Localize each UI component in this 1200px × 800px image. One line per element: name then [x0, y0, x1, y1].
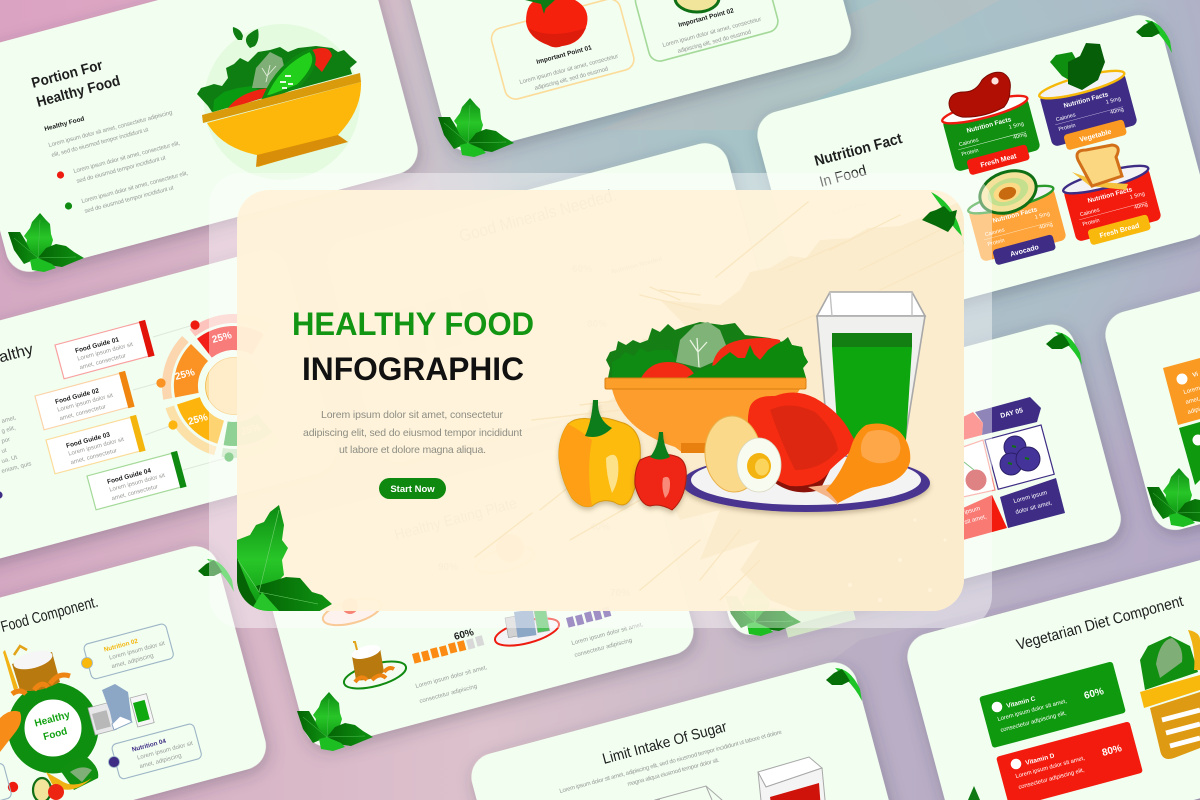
- day 04 caption box: ipsum: [964, 506, 981, 516]
- guide 01: [55, 320, 155, 380]
- day 04 caption box: sit amet,: [964, 514, 988, 526]
- cartons on red plate: [492, 609, 562, 651]
- box nutrition 02: Lorem ipsum dolor sit: [109, 641, 166, 662]
- faint heading: Nutrition Fact: [831, 202, 867, 217]
- hub ring: Healthy: [33, 709, 72, 730]
- can: fresh meat: 1 5mg: [1008, 121, 1025, 131]
- box nutrition 02: [83, 623, 174, 680]
- can: vegetable: Nutrition Facts: [1063, 91, 1109, 110]
- box nutrition 02: amet, adipiscing: [111, 653, 154, 670]
- caption 2: [571, 622, 644, 659]
- body text partial: por: [1, 437, 11, 445]
- caption 2: consectetur adipiscing: [574, 638, 633, 659]
- can: fresh meat: [940, 72, 1043, 179]
- red dot: [8, 782, 18, 792]
- icon: corner leaves bottom: [725, 577, 801, 636]
- icon: yellow pepper: [559, 400, 640, 507]
- icon: cartons: [88, 684, 154, 735]
- heading: good minerals: Good Minerals Needed.: [457, 186, 619, 246]
- card: vitamins partial: [1100, 210, 1200, 535]
- can: fresh bread: Calories: [1079, 207, 1101, 218]
- card: important points: [393, 0, 856, 157]
- card: vegetarian diet component: [902, 532, 1200, 800]
- heading: [813, 130, 904, 191]
- icon: leaves top right: [922, 192, 964, 247]
- icon: corner leaves: [297, 692, 373, 751]
- day 05 caption box: Lorem ipsum: [1013, 490, 1048, 505]
- text: point 01 body: Lorem ipsum dolor sit amet, consectetur: [519, 54, 619, 86]
- dot red: [190, 320, 200, 330]
- label: important point 01: Important Point 01: [536, 44, 593, 66]
- faint percentages: [572, 264, 607, 330]
- icon: small corner leaves: [826, 668, 862, 701]
- description: adipiscing elit, sed do eiusmod tempor incididunt: [303, 427, 522, 439]
- icon: small corner leaves: [1136, 20, 1172, 53]
- guide 04: [87, 451, 187, 511]
- donut chart: 25%: [240, 422, 262, 438]
- icon: salad: [606, 322, 808, 378]
- can: avocado: Protein: [987, 238, 1005, 248]
- green vitamin box: [1179, 422, 1200, 485]
- day 05 tab: DAY 05: [1000, 407, 1024, 420]
- icon: tomato: [525, 0, 588, 47]
- button: start now: [379, 478, 446, 499]
- text: point 01 body: adipiscing elit, sed do eiusmod: [534, 66, 609, 92]
- icon: fruit pile: [33, 758, 98, 800]
- can: vegetable: Calories: [1055, 112, 1077, 123]
- can: fresh bread: [1061, 145, 1164, 249]
- donut chart: 25%: [211, 330, 233, 346]
- caption 1: consectetur adipiscing: [419, 684, 478, 705]
- can: fresh meat: 40mg: [1013, 132, 1027, 141]
- text: point 02 body: Lorem ipsum dolor sit amet, consectetur: [662, 17, 762, 49]
- body text partial: amet,: [1, 415, 17, 425]
- guide 03: amet, consectetur: [70, 448, 118, 466]
- vitamin c box: consectetur adipiscing elit,: [1000, 710, 1068, 734]
- icon: salad bowl: [197, 24, 361, 180]
- day 04 caption box: [963, 495, 1007, 540]
- body text partial: ut: [1, 448, 8, 455]
- box nutrition 04: Nutrition 04: [131, 738, 167, 754]
- vitamin d box: Lorem ipsum dolor sit amet,: [1015, 756, 1086, 780]
- box nutrition 04: Lorem ipsum dolor sit: [137, 741, 194, 762]
- icon: corner leaves top: [1046, 332, 1082, 365]
- bullet text green: sed do eiusmod tempor incididunt ut: [84, 185, 175, 215]
- card: good minerals needed: [322, 138, 781, 467]
- check icon orange: [1176, 374, 1188, 384]
- nutrition 03 box stub: [0, 762, 12, 800]
- icon: juice glass: [817, 292, 925, 440]
- icon: blueberries: [1000, 436, 1040, 475]
- icon: corner leaves: [1147, 468, 1200, 527]
- caption 1: [415, 665, 488, 705]
- progress bar 60% label: 60%: [453, 627, 475, 643]
- day 05 tab: [975, 397, 1041, 435]
- can: avocado: Avocado: [1010, 244, 1040, 258]
- orange box text: [1183, 372, 1200, 416]
- vitamin c box: 60%: [1083, 686, 1105, 702]
- progress bar orange: [412, 635, 484, 664]
- card: healthy eating plate: [251, 426, 699, 752]
- can: vegetable: Protein: [1058, 123, 1076, 133]
- hub ring: [16, 691, 90, 765]
- faint percent labels: 70%: [610, 588, 630, 599]
- can: fresh bread: 40mg: [1134, 202, 1148, 211]
- card: portion for healthy food: [0, 0, 423, 277]
- icon: small leaf: [968, 786, 980, 800]
- heading: Vegetarian Diet Component: [1015, 593, 1186, 654]
- icon: plate: [682, 454, 930, 512]
- icon: avocado: [675, 0, 719, 12]
- heading: In Food: [818, 162, 868, 191]
- body text: Lorem ipsum dolor sit amet, adipiscing elit, sed do eiusmod tempor incididunt ut labore et dolore: [559, 729, 783, 795]
- day 05 picture box: [985, 425, 1054, 489]
- vitamin c box: [979, 661, 1126, 748]
- icon: cherry: [964, 462, 986, 490]
- subheading: Healthy Food: [44, 116, 85, 133]
- body text partial: g elit,: [1, 425, 17, 435]
- guide 03: Lorem ipsum dolor sit: [68, 437, 125, 458]
- can: fresh bread: Fresh Bread: [1099, 223, 1140, 240]
- vitamin d box: [996, 721, 1143, 800]
- title line 2: INFOGRAPHIC: [302, 351, 524, 387]
- faint percent labels: 90%: [438, 562, 458, 573]
- dot yellow: [82, 658, 92, 668]
- can: avocado: 40mg: [1039, 222, 1053, 231]
- guide 01: Food Guide 01: [74, 336, 120, 355]
- can: fresh meat: Nutrition Facts: [966, 116, 1012, 135]
- vitamin d box: Vitamin D: [1025, 752, 1056, 767]
- donut chart: 25%: [187, 412, 209, 428]
- heading: Limit Intake Of Sugar: [601, 718, 729, 768]
- day 04 tab: [963, 412, 983, 440]
- icon: large leaves bottom left: [237, 505, 332, 612]
- card: healthy food guide donut: [0, 245, 341, 575]
- faint cartons: [390, 287, 496, 360]
- vitamin c box: Vitamin C: [1006, 695, 1037, 710]
- title line 1: HEALTHY FOOD: [292, 306, 534, 342]
- can: fresh bread: Nutrition Facts: [1087, 186, 1133, 205]
- can: fresh meat: Protein: [961, 148, 979, 158]
- can: vegetable: Vegetable: [1079, 129, 1112, 144]
- glass small: [655, 786, 722, 800]
- check icon green: [1192, 434, 1200, 446]
- guide 02: Food Guide 02: [54, 387, 100, 406]
- guide 02: Lorem ipsum dolor sit: [57, 393, 114, 414]
- bullet text red: sed do eiusmod tempor incididunt ut: [76, 155, 167, 185]
- pot on green plate: [341, 642, 409, 694]
- guide 01: Lorem ipsum dolor sit: [77, 342, 134, 363]
- guide 02: [35, 371, 135, 431]
- can: vegetable: 1 5mg: [1105, 96, 1122, 106]
- icon: corner leaves: [8, 213, 84, 272]
- body text partial: ua. Ut: [1, 455, 18, 465]
- box: point 02: [633, 0, 780, 64]
- card: food component: [0, 541, 271, 800]
- dot yellow: [168, 420, 178, 430]
- label: important point 02: Important Point 02: [678, 7, 735, 29]
- guide 04: Lorem ipsum dolor sit: [109, 473, 166, 494]
- can: fresh bread: 1 5mg: [1129, 191, 1146, 201]
- icon: corner leaves: [438, 98, 514, 157]
- can: vegetable: 40mg: [1110, 107, 1124, 116]
- faint percentages: 80%: [587, 319, 607, 330]
- day 04 picture box: [963, 440, 995, 497]
- connector lines: [133, 326, 226, 470]
- faint heading: Daily Food Preparation: [810, 381, 951, 434]
- vitamin c box: Lorem ipsum dolor sit amet,: [997, 699, 1068, 723]
- orange box text: Vi: [1192, 372, 1199, 379]
- caption 1: Lorem ipsum dolor sit amet,: [415, 665, 488, 690]
- dot green: [224, 452, 234, 462]
- faint nutrition text: Nutrition Needed: [611, 256, 663, 276]
- donut chart: 25%: [174, 367, 196, 383]
- bullet text green: Lorem ipsum dolor sit amet, consectetur elit,: [81, 171, 189, 205]
- glass tall with red: [758, 757, 826, 800]
- box: point 01: [489, 0, 636, 102]
- body text: magna aliqua eiusmod tempor dolor sit.: [627, 757, 721, 788]
- text: point 02 body: adipiscing elit, sed do eiusmod: [677, 29, 752, 55]
- description: Lorem ipsum dolor sit amet, consectetur: [321, 409, 504, 421]
- faint percentages: 60%: [572, 264, 592, 275]
- icon: whole egg: [702, 414, 764, 494]
- icon: small corner leaves: [198, 559, 234, 592]
- body text: Lorem ipsum dolor sit amet, consectetur adipiscing: [48, 110, 173, 149]
- heading: Portion For: [30, 57, 105, 92]
- guide 04: amet, consectetur: [111, 484, 159, 502]
- faint plate: [473, 534, 537, 578]
- day 05 caption box: dolor sit amet,: [1015, 500, 1053, 516]
- description: ut labore et dolore magna aliqua.: [339, 444, 486, 456]
- faint day columns: [770, 428, 946, 638]
- donut chart: [162, 314, 280, 458]
- bullet red: [57, 171, 64, 179]
- can: avocado: 1 5mg: [1034, 211, 1051, 221]
- faint percent labels: 40%: [590, 522, 610, 533]
- box nutrition 04: amet, adipiscing: [139, 753, 182, 770]
- heading: Nutrition Fact: [813, 130, 904, 170]
- card: nutrition fact in food: [752, 10, 1200, 340]
- vitamin d box: consectetur adipiscing elit,: [1018, 767, 1086, 791]
- can: avocado: Calories: [984, 227, 1006, 238]
- vitamin d box: 80%: [1101, 743, 1123, 759]
- heading: [30, 57, 122, 111]
- icon: half egg: [737, 438, 781, 492]
- purple progress bar: [566, 606, 611, 628]
- guide 01: amet, consectetur: [79, 353, 127, 371]
- bullet text red: Lorem ipsum dolor sit amet, consectetur elit,: [73, 141, 181, 175]
- guide 03: Food Guide 03: [65, 431, 111, 450]
- icon: vegetable basket: [1140, 630, 1200, 759]
- orange vitamin box: [1163, 358, 1200, 425]
- card: daily food preparation: [677, 319, 1126, 640]
- glass frame: [209, 173, 992, 628]
- faint plate 2: [320, 594, 384, 630]
- heading: Healthy Food: [35, 73, 122, 111]
- faint percent labels: [438, 522, 630, 599]
- guide 02: amet, consectetur: [59, 404, 107, 422]
- box nutrition 04: [111, 723, 202, 780]
- button: start now: Start Now: [390, 484, 435, 495]
- caption 2: Lorem ipsum dolor sit amet,: [571, 622, 644, 647]
- body text: elit, sed do eiusmod tempor incididunt ut: [51, 127, 149, 159]
- dot orange: [156, 378, 166, 388]
- icon: meat: [748, 392, 858, 492]
- dot purple: [108, 756, 120, 768]
- bullet green: [65, 202, 72, 210]
- body text partial: eniam, quis: [1, 461, 32, 475]
- bullet purple: [0, 491, 3, 499]
- icon: bowl: [605, 378, 806, 453]
- day 05 caption box: [1000, 478, 1065, 528]
- can: vegetable: [1037, 43, 1140, 154]
- icon: pot: [3, 646, 70, 694]
- can: fresh meat: Calories: [958, 137, 980, 148]
- icon: chicken: [0, 711, 21, 752]
- body text partial: [1, 415, 32, 475]
- brush splash: [475, 200, 964, 612]
- guide 04: Food Guide 04: [106, 467, 152, 486]
- card: limit intake of sugar: [466, 657, 910, 800]
- box nutrition 02: Nutrition 02: [103, 638, 139, 654]
- can: avocado: [966, 163, 1069, 269]
- description: [303, 409, 522, 456]
- icon: red pepper: [635, 432, 686, 510]
- icon: chicken leg: [808, 424, 910, 505]
- guide 03: [46, 415, 146, 475]
- main panel: [237, 190, 964, 612]
- can: fresh meat: Fresh Meat: [980, 153, 1018, 169]
- heading: healthy eating plate: Healthy Eating Plate: [393, 495, 519, 544]
- hub ring: Food: [42, 726, 69, 743]
- can: fresh bread: Protein: [1082, 218, 1100, 228]
- can: avocado: Nutrition Facts: [992, 206, 1038, 225]
